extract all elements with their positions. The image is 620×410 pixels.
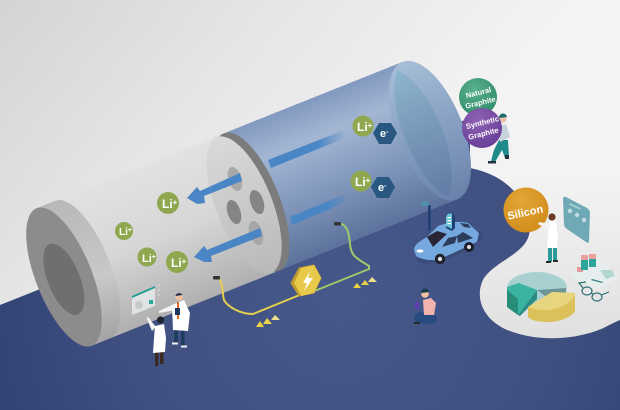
- blue cylinder body: [213, 62, 457, 275]
- green cable: [312, 222, 369, 292]
- eyeglasses: [579, 282, 609, 301]
- gray cylinder inner face: [191, 127, 297, 283]
- Li ion badge: +: [182, 257, 187, 266]
- pie chart: [507, 272, 575, 322]
- electron badge: -: [386, 129, 389, 136]
- Li ion badge: [138, 248, 156, 266]
- ball synthetic graphite: Graphite: [467, 125, 499, 142]
- Li ion badge: [166, 251, 188, 273]
- navy floor: [0, 118, 620, 410]
- left band: [37, 190, 136, 346]
- ball synthetic graphite: Synthetic: [465, 114, 500, 131]
- Li ion badge: Li: [171, 256, 182, 270]
- floating data tile: [563, 197, 590, 243]
- blue arrow bottom: [194, 194, 349, 262]
- Li ion badge: +: [128, 227, 132, 234]
- seated person with phone: [414, 288, 437, 324]
- battery cylinder: [26, 60, 471, 346]
- scientist at silicon ball: [538, 213, 558, 263]
- Li ion badge: +: [152, 254, 156, 261]
- separator rim: [198, 123, 305, 281]
- scientist with clipboard: [159, 293, 190, 348]
- Li ion badge: [115, 222, 133, 240]
- yellow arrowheads left: [256, 315, 280, 327]
- lightning battery hexagon: [291, 265, 321, 296]
- Li ion badge: [352, 116, 374, 136]
- blue arrow top: [187, 131, 345, 204]
- left end face: [11, 198, 117, 356]
- Li ion badge: Li: [119, 227, 128, 238]
- ball silicon: Silicon: [506, 203, 545, 223]
- Li ion badge: [350, 170, 372, 192]
- Li ion badge: Li: [355, 175, 366, 189]
- Li ion badge: Li: [142, 253, 152, 265]
- worker carrying ball: [488, 113, 510, 164]
- ball natural graphite: Natural: [465, 85, 492, 100]
- electron badge: e: [378, 182, 384, 194]
- ball silicon: [504, 188, 548, 232]
- gray cylinder body: [37, 135, 275, 346]
- yellow cable: [213, 276, 302, 314]
- electric car: [413, 222, 487, 270]
- electron badge: -: [384, 183, 387, 190]
- face holes: [224, 165, 267, 247]
- Li ion badge: Li: [162, 197, 173, 211]
- electron badge: [373, 123, 397, 144]
- electron badge: e: [380, 128, 386, 140]
- car charging sign: [446, 213, 455, 231]
- ball synthetic graphite: [462, 108, 502, 148]
- ball natural graphite: Graphite: [464, 94, 496, 111]
- ball natural graphite: [459, 78, 497, 116]
- white island: [470, 170, 620, 340]
- Li ion badge: +: [173, 198, 178, 207]
- Li ion badge: +: [368, 121, 373, 130]
- Li ion badge: [157, 192, 179, 214]
- electron badge: [371, 177, 395, 198]
- Li ion badge: Li: [357, 120, 368, 134]
- scientist seen from behind: [146, 316, 166, 366]
- left end hole: [35, 238, 93, 320]
- chart paper with bars: [570, 254, 620, 290]
- Li ion badge: +: [366, 176, 371, 185]
- cylinder end cap: [389, 60, 471, 200]
- monitor panel: [132, 284, 160, 315]
- yellow arrowheads right: [353, 277, 377, 288]
- charger pole: [421, 201, 431, 231]
